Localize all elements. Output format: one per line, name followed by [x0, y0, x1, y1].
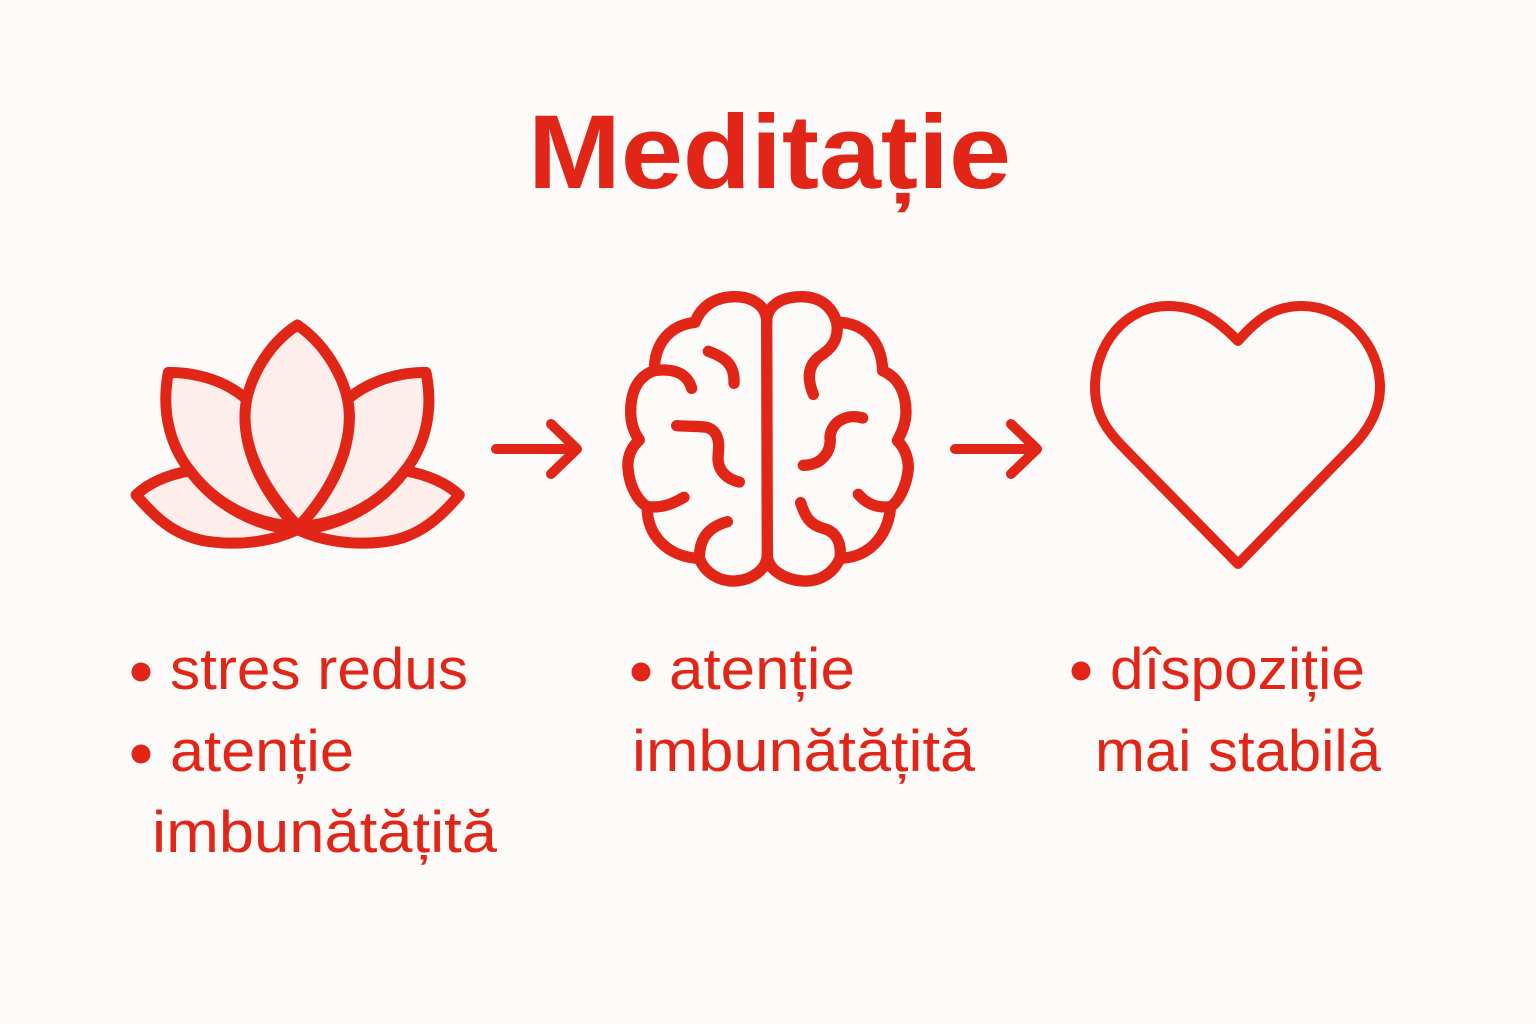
list: column three: mai stabilă: [1095, 719, 1382, 784]
list: column one: atenție: [170, 719, 354, 784]
right hemisphere outline: [767, 297, 908, 581]
list: column three: [1072, 637, 1382, 784]
list: column one: [132, 637, 498, 865]
list: column two: imbunătățită: [632, 719, 976, 784]
arrow: brain to heart: [955, 424, 1037, 474]
icon: brain: [628, 297, 908, 581]
midline: [750, 317, 784, 557]
list: column one: stres redus: [170, 637, 468, 702]
list: column two: [632, 637, 976, 784]
list: column two: atenție: [669, 637, 855, 702]
list: column three: dîspoziție: [1110, 637, 1365, 702]
right folds: [809, 322, 837, 394]
icon: heart: [1095, 306, 1380, 564]
left hemisphere outline: [628, 297, 767, 581]
list: column one: imbunătățită: [152, 800, 498, 865]
title: Meditație: [528, 94, 1011, 213]
arrow: lotus to brain: [496, 424, 577, 474]
icon: lotus: [136, 325, 459, 543]
left folds: [654, 370, 692, 388]
